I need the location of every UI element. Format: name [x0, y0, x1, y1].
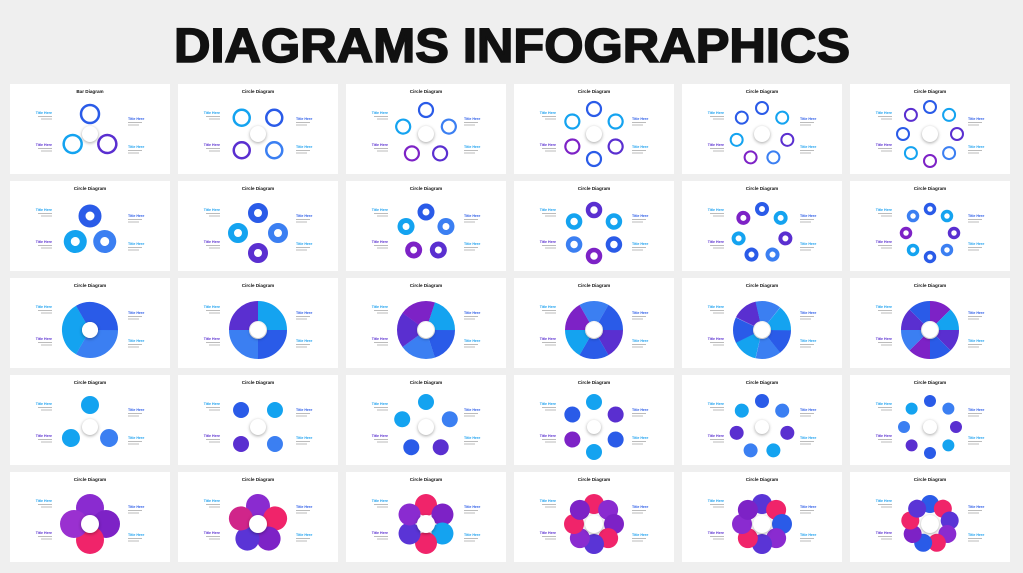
card: row4 col2: Circle Diagram: [242, 380, 274, 385]
card: row5 col3: Circle Diagram: [410, 477, 442, 482]
card: row5 col1: Circle Diagram: [74, 477, 106, 482]
card: row5 col5: Circle Diagram: [746, 477, 778, 482]
card: row1 col1: [10, 84, 170, 174]
card: row3 col4: [514, 278, 674, 368]
card: row4 col5: Circle Diagram: [746, 380, 778, 385]
card: row2 col2: [178, 181, 338, 271]
card: row5 col2: [178, 472, 338, 562]
card: row5 col6: [850, 472, 1010, 562]
card: row1 col5: Circle Diagram: [746, 89, 778, 94]
card: row1 col4: Circle Diagram: [578, 89, 610, 94]
card: row1 col1: Bar Diagram: [76, 89, 104, 94]
card: row3 col6: Circle Diagram: [914, 283, 946, 288]
card: row1 col3: Circle Diagram: [410, 89, 442, 94]
card: row5 col1: [10, 472, 170, 562]
card: row5 col6: Circle Diagram: [914, 477, 946, 482]
card: row1 col5: [682, 84, 842, 174]
card: row4 col1: [10, 375, 170, 465]
card: row3 col2: Circle Diagram: [242, 283, 274, 288]
card: row3 col5: Circle Diagram: [746, 283, 778, 288]
card: row4 col6: [850, 375, 1010, 465]
card: row5 col2: Circle Diagram: [242, 477, 274, 482]
card: row1 col6: [850, 84, 1010, 174]
card: row5 col3: [346, 472, 506, 562]
card: row1 col2: [178, 84, 338, 174]
card: row1 col6: Circle Diagram: [914, 89, 946, 94]
card: row5 col4: Circle Diagram: [578, 477, 610, 482]
title: DIAGRAMS INFOGRAPHICS: [174, 20, 850, 73]
card: row3 col3: Circle Diagram: [410, 283, 442, 288]
card: row4 col3: [346, 375, 506, 465]
card: row2 col5: [682, 181, 842, 271]
card: row2 col2: Circle Diagram: [242, 186, 274, 191]
card: row4 col4: Circle Diagram: [578, 380, 610, 385]
card: row2 col3: [346, 181, 506, 271]
card: row2 col6: [850, 181, 1010, 271]
card: row3 col6: [850, 278, 1010, 368]
card: row4 col3: Circle Diagram: [410, 380, 442, 385]
card: row3 col2: [178, 278, 338, 368]
card: row5 col5: [682, 472, 842, 562]
card: row4 col4: [514, 375, 674, 465]
card: row3 col3: [346, 278, 506, 368]
card: row2 col4: [514, 181, 674, 271]
card: row1 col3: [346, 84, 506, 174]
card: row2 col6: Circle Diagram: [914, 186, 946, 191]
card: row2 col1: Circle Diagram: [74, 186, 106, 191]
card: row1 col4: [514, 84, 674, 174]
card: row4 col2: [178, 375, 338, 465]
card: row3 col1: Circle Diagram: [74, 283, 106, 288]
card: row2 col1: [10, 181, 170, 271]
card: row5 col4: [514, 472, 674, 562]
card: row4 col6: Circle Diagram: [914, 380, 946, 385]
card: row2 col3: Circle Diagram: [410, 186, 442, 191]
card: row4 col1: Circle Diagram: [74, 380, 106, 385]
card: row2 col4: Circle Diagram: [578, 186, 610, 191]
card: row1 col2: Circle Diagram: [242, 89, 274, 94]
card: row3 col5: [682, 278, 842, 368]
card: row3 col1: [10, 278, 170, 368]
card: row2 col5: Circle Diagram: [746, 186, 778, 191]
card: row3 col4: Circle Diagram: [578, 283, 610, 288]
card: row4 col5: [682, 375, 842, 465]
